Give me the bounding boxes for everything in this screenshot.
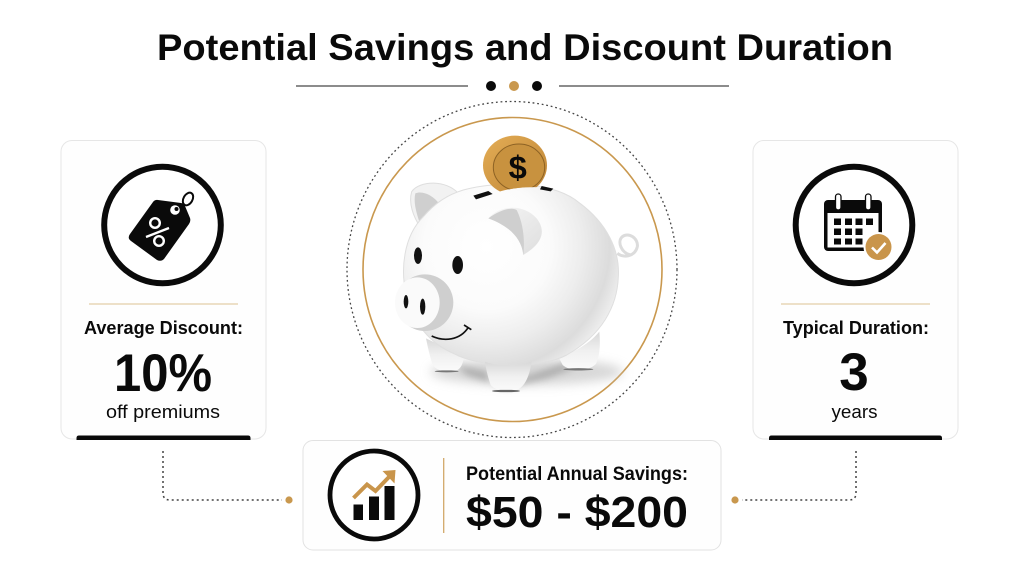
pig snout (397, 274, 453, 331)
pig front ear (488, 208, 542, 255)
connector: right card to savings card (731, 451, 856, 504)
title: Potential Savings and Discount Duration (157, 27, 893, 68)
pig back leg (558, 332, 600, 370)
icon: calendar with check (796, 167, 912, 283)
pig front leg (485, 362, 532, 391)
icon: rising bar chart (330, 451, 418, 539)
label: potential annual savings: Potential Annual Savings: (466, 464, 688, 485)
coin: $ (509, 149, 527, 186)
panel: potential annual savings (303, 440, 721, 550)
caption: years: years (832, 402, 878, 422)
pig smile (432, 325, 471, 339)
caption: off premiums: off premiums (106, 402, 220, 422)
piggy bank illustration (395, 136, 637, 392)
label: typical duration: Typical Duration: (783, 318, 929, 338)
panel: typical duration (753, 140, 958, 440)
icon: percent price tag (104, 167, 221, 283)
accent bar: duration card (769, 436, 942, 440)
pig belly shadow (457, 363, 573, 388)
pig slot (473, 186, 553, 199)
accent bar: discount card (76, 436, 250, 440)
divider: discount card (89, 303, 238, 305)
pig tail (617, 235, 637, 256)
value: 10%: 10% (114, 344, 212, 403)
value: $50 - $200: $50 - $200 (466, 488, 688, 537)
divider: savings card (443, 458, 445, 533)
coin (483, 136, 547, 195)
pig back ear (411, 183, 458, 227)
divider: duration card (781, 303, 930, 305)
dotted outer ring (347, 102, 677, 438)
value: 3: 3 (839, 343, 869, 402)
pig left leg (426, 338, 464, 372)
gold inner ring (363, 118, 662, 422)
pig eyes (414, 247, 422, 264)
panel: average discount (61, 140, 266, 440)
connector: left card to savings card (163, 451, 293, 504)
pig body (404, 184, 618, 365)
title ornament: rule and dots (296, 81, 729, 91)
label: average discount: Average Discount: (84, 318, 243, 338)
pig shadow (430, 358, 623, 385)
